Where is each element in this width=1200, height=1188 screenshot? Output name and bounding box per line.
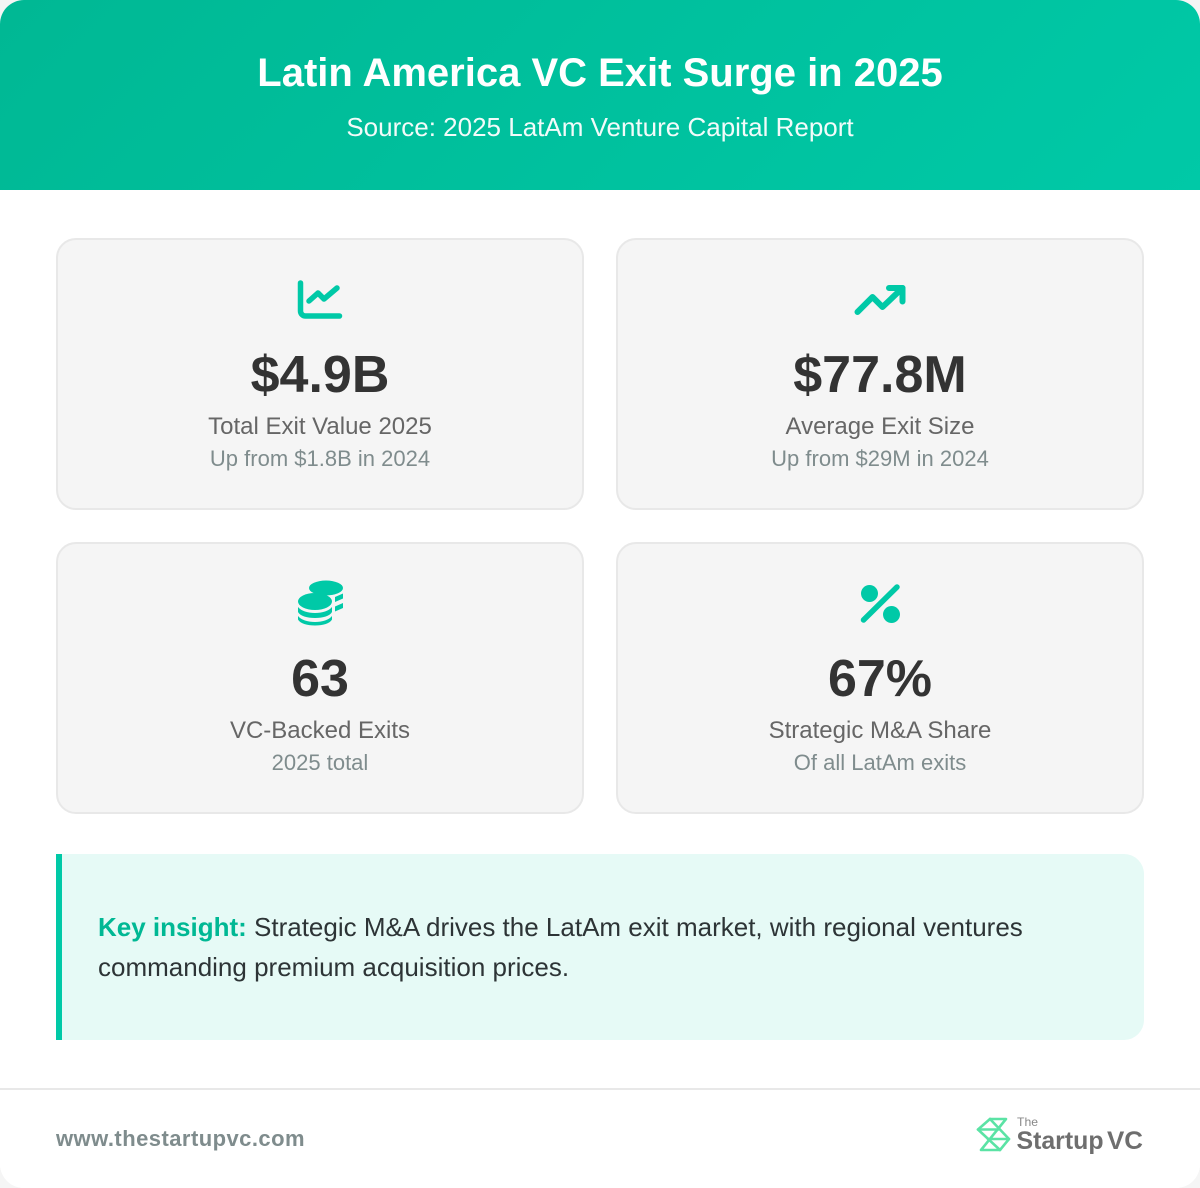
icon: coins bbox=[298, 580, 343, 626]
icon: trending arrow bbox=[854, 285, 906, 315]
panel: total exit value bbox=[56, 238, 584, 510]
panel: average exit size bbox=[616, 238, 1144, 510]
title: Latin America VC Exit Surge in 2025 bbox=[257, 51, 943, 95]
logo text: Startup VC: Startup bbox=[1016, 1127, 1104, 1155]
logo text: Startup VC bbox=[1016, 1127, 1143, 1155]
value: $77.8M bbox=[793, 346, 967, 404]
note: 2025 total bbox=[272, 750, 368, 775]
label: Strategic M&A Share bbox=[769, 717, 991, 744]
icon: logo mark bbox=[978, 1119, 1009, 1150]
logo text: The: The bbox=[1017, 1115, 1038, 1129]
subtitle: Source: 2025 LatAm Venture Capital Report bbox=[346, 112, 854, 142]
logo bbox=[976, 1115, 1143, 1155]
footer bbox=[0, 1088, 1200, 1188]
icon: line chart bbox=[298, 280, 342, 319]
note: Of all LatAm exits bbox=[794, 750, 966, 775]
header banner bbox=[0, 0, 1200, 190]
note: Up from $1.8B in 2024 bbox=[210, 446, 430, 471]
insight text: Key insight: Strategic M&A drives the LatAm exit market, with regional ventures commanding premium acquisition prices. bbox=[98, 912, 1023, 982]
panel: VC-backed exits bbox=[56, 542, 584, 814]
note: Up from $29M in 2024 bbox=[771, 446, 989, 471]
icon: percent bbox=[860, 584, 900, 623]
logo text: Startup VC: VC bbox=[1107, 1127, 1143, 1155]
value: 63 bbox=[291, 650, 349, 708]
label: Total Exit Value 2025 bbox=[208, 413, 432, 440]
panel: strategic M&A share bbox=[616, 542, 1144, 814]
value: 67% bbox=[828, 650, 932, 708]
label: VC-Backed Exits bbox=[230, 717, 410, 744]
callout: key insight bbox=[56, 854, 1144, 1040]
website url: www.thestartupvc.com bbox=[56, 1126, 305, 1151]
value: $4.9B bbox=[251, 346, 389, 404]
label: Average Exit Size bbox=[786, 413, 974, 440]
